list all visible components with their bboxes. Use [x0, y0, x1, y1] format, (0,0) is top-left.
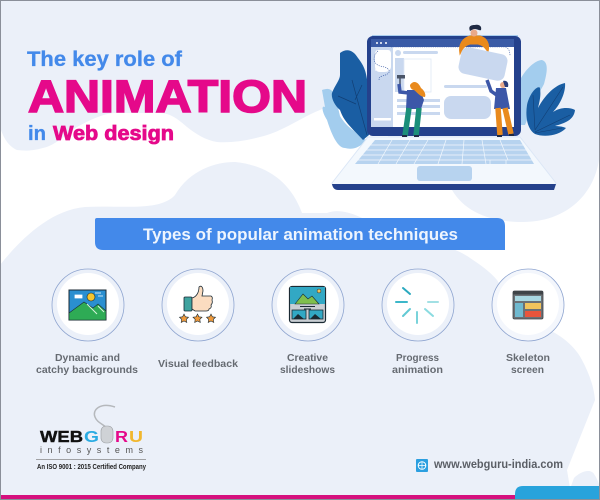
- icon: landscape picture: [69, 290, 106, 320]
- label: slideshows: [280, 364, 335, 376]
- label: catchy backgrounds: [36, 364, 138, 376]
- left plants: [322, 50, 369, 149]
- icon: slideshow panels: [290, 286, 326, 322]
- icon: globe: [416, 459, 428, 472]
- technique: visual feedback: [158, 269, 238, 370]
- footer blue tab: [515, 486, 600, 500]
- wordmark: WEB: [40, 429, 83, 446]
- certification line: An ISO 9001 : 2015 Certified Company: [37, 462, 147, 471]
- icon: thumbs up with stars: [180, 286, 216, 322]
- label: [392, 352, 443, 376]
- laptop base: [332, 137, 556, 190]
- man lifting card: [487, 80, 514, 137]
- right plants: [520, 60, 575, 136]
- icon: loading spinner: [396, 288, 438, 323]
- label: Dynamic and: [55, 352, 120, 364]
- label: Skeleton: [506, 352, 550, 364]
- title line: in Web design: in: [28, 123, 46, 145]
- title line: The key role of: The key role of: [27, 48, 183, 71]
- wordmark: [40, 429, 143, 446]
- label: animation: [392, 364, 443, 376]
- wordmark: U: [129, 429, 143, 446]
- icon circle: [382, 269, 454, 341]
- woman with paint roller: [397, 75, 425, 137]
- label: screen: [511, 364, 544, 376]
- title: [27, 48, 307, 145]
- laptop illustration: [322, 25, 575, 190]
- url text: www.webguru-india.com: [433, 457, 563, 471]
- banner heading: Types of popular animation techniques: [143, 226, 458, 244]
- label: Visual feedback: [158, 358, 238, 370]
- logo subtitle: infosystems: [40, 445, 144, 455]
- label: Progress: [396, 352, 439, 364]
- laptop screen: [367, 35, 521, 136]
- icon: mouse cable: [94, 405, 115, 433]
- company logo: [36, 405, 147, 471]
- technique: creative slideshows: [272, 269, 344, 376]
- icon: skeleton layout: [513, 291, 543, 319]
- website link: [416, 457, 563, 472]
- person on top holding card: [457, 25, 509, 82]
- keyboard: [355, 140, 534, 164]
- label: [280, 352, 335, 376]
- footer pink bar: [0, 495, 520, 500]
- section banner: [95, 218, 505, 250]
- title: Web design: [53, 123, 174, 145]
- label: Creative: [287, 352, 328, 364]
- icon circle: [272, 269, 344, 341]
- trackpad: [417, 166, 472, 181]
- technique: progress animation: [382, 269, 454, 376]
- label: [506, 352, 550, 376]
- wordmark: R: [115, 429, 128, 446]
- icon circle: [52, 269, 124, 341]
- icon circle: [162, 269, 234, 341]
- title line: ANIMATION: ANIMATION: [28, 71, 307, 122]
- wordmark: G: [84, 429, 99, 446]
- label: [36, 352, 138, 376]
- technique: dynamic backgrounds: [36, 269, 138, 376]
- icon: mouse body: [101, 426, 113, 443]
- technique: skeleton screen: [492, 269, 564, 376]
- icon circle: [492, 269, 564, 341]
